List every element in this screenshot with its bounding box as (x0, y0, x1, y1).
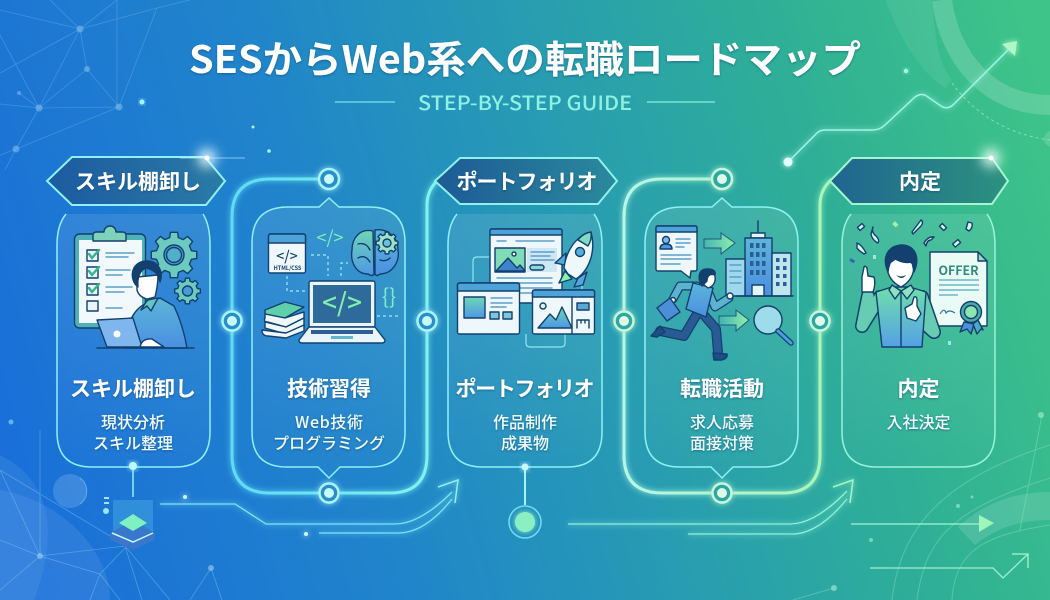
arrow to office (704, 233, 735, 254)
person with arms (862, 245, 934, 347)
gear small (175, 278, 200, 304)
panel 2 description: Web技術 (295, 409, 363, 433)
panel 4 outline (645, 198, 798, 478)
subtitle: STEP-BY-STEP GUIDE (418, 87, 632, 116)
panel 4: job search (645, 198, 798, 478)
tag 3: job offer: 内定 (899, 166, 941, 196)
icon: code window, brain, laptop, books (262, 224, 398, 343)
panel 2 description (273, 409, 385, 454)
laptop (309, 281, 375, 327)
left browser (458, 283, 520, 334)
panel 1 outline (57, 214, 210, 467)
network decoration: bottom right (793, 412, 1050, 600)
panel 5 outline (842, 214, 995, 467)
tag 2: portfolio (435, 158, 617, 204)
icon: offer letter and person with thumbs up: OFFER (938, 260, 979, 279)
connector: second loop (624, 179, 831, 493)
panel 3 description: 作品制作 (493, 409, 557, 433)
tag 1: skill inventory: スキル棚卸し (75, 166, 201, 196)
icon: browser windows and rocket (458, 229, 594, 347)
tag 1: skill inventory (47, 149, 245, 205)
panel 3 description (493, 409, 557, 454)
buildings (757, 221, 759, 233)
panel 1 heading: スキル棚卸し (70, 373, 196, 403)
icon: code window, brain, laptop, books: </> (276, 246, 298, 266)
panel 4 frame (645, 198, 798, 478)
tag 2: portfolio: ポートフォリオ (456, 166, 598, 196)
panel 2 outline (252, 198, 405, 478)
network decoration: bottom left (0, 420, 222, 600)
panel 5: job offer (842, 214, 995, 467)
panel 4 description: 面接対策 (690, 430, 754, 454)
panel 4 description: 求人応募 (690, 409, 754, 433)
center node under panel 3 (509, 464, 541, 538)
panel 2: tech learning (252, 198, 405, 478)
panel 2 frame (252, 198, 405, 478)
panel 2 description: プログラミング (273, 430, 385, 454)
thumb up right hand (905, 297, 921, 321)
icon: running person, resume and office (651, 221, 793, 360)
books (265, 302, 304, 318)
arrow to search (719, 310, 749, 331)
runner (651, 269, 733, 360)
panel 4 heading: 転職活動 (680, 373, 764, 403)
thumb up left hand (862, 266, 875, 292)
panel 1 description: 現状分析 (101, 409, 165, 433)
briefcase (657, 298, 680, 321)
flow arrow 4 (870, 554, 1028, 578)
tag 3: job offer (830, 149, 1008, 204)
rocket (555, 232, 593, 287)
panel 3: portfolio (448, 214, 602, 467)
main browser (490, 229, 562, 303)
confetti (857, 220, 972, 254)
panel 1: skill inventory (57, 214, 210, 467)
sparkle dots: upper (140, 69, 908, 153)
panel 4 description (690, 409, 754, 454)
flow arrow 2 (568, 480, 853, 534)
connector: first loop (232, 179, 438, 493)
magnifier (754, 306, 782, 334)
icon: offer letter and person with thumbs up (849, 220, 987, 347)
right browser (532, 290, 594, 334)
resume bubble (656, 226, 697, 278)
icon: code window, brain, laptop, books: </> (316, 224, 344, 250)
panel 3 frame (448, 214, 602, 467)
title: SESからWeb系への転職ロードマップ (189, 29, 861, 84)
icon: code window, brain, laptop, books: {} (382, 281, 396, 311)
nodes on connectors (222, 169, 830, 502)
person (124, 298, 187, 348)
network decoration: top left (0, 0, 190, 170)
panel 3 outline (448, 214, 602, 467)
icon: clipboard and person at laptop (74, 226, 200, 348)
icon: code window, brain, laptop, books: HTML/CSS (274, 264, 302, 272)
offer letter (930, 252, 987, 326)
panel 1 description: スキル整理 (93, 430, 173, 454)
flow arrow 1 (160, 480, 458, 536)
growth arrow: top right (784, 41, 1017, 166)
panel 1 description (93, 409, 173, 454)
panel 5 description: 入社決定 (886, 409, 951, 433)
gear large (151, 232, 197, 278)
flow arrow 3 (851, 515, 994, 532)
panel 5 frame (842, 214, 995, 467)
panel 1 frame (57, 214, 210, 467)
decoration: top right rings (885, 0, 1050, 147)
panel 3 heading: ポートフォリオ (456, 373, 594, 403)
brain (352, 230, 374, 276)
panel 3 description: 成果物 (501, 430, 549, 454)
panel 2 heading: 技術習得 (287, 373, 371, 403)
icon: code window, brain, laptop, books: </> (322, 283, 362, 320)
start marker: isometric cube (103, 462, 155, 550)
panel 5 heading: 内定 (898, 373, 940, 403)
